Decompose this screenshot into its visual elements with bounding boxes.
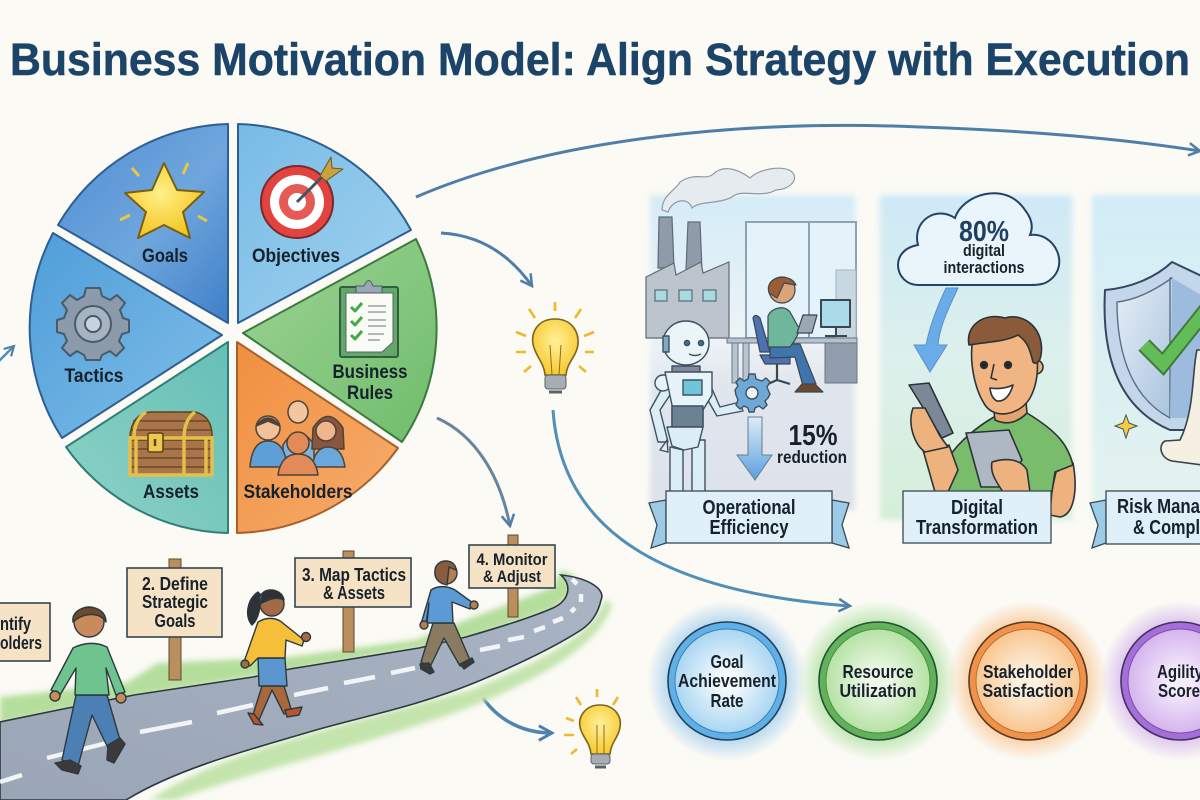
segment: stakeholders bbox=[237, 342, 398, 533]
kpi: stakeholder satisfaction: Satisfaction bbox=[982, 680, 1074, 701]
desk bbox=[727, 338, 857, 383]
banner: operational efficiency bbox=[649, 491, 849, 548]
kpi: goal achievement rate bbox=[647, 601, 807, 761]
panel: winding road bbox=[0, 535, 612, 800]
callout: cloud 80% digital interactions: interactions bbox=[944, 259, 1024, 277]
icon: smoke clouds bbox=[662, 168, 795, 212]
road grass upper bbox=[0, 570, 575, 724]
icon: lower light bulb bbox=[564, 689, 620, 767]
arrow: wheel to top bulb bbox=[441, 233, 532, 286]
signpost 4: & Adjust bbox=[483, 567, 541, 586]
segment: tactics bbox=[30, 233, 222, 438]
signpost 2: Strategic bbox=[142, 592, 208, 612]
kpi: goal achievement rate: Goal bbox=[710, 651, 744, 672]
person with phone and tablet bbox=[909, 317, 1075, 517]
panel: digital transformation bbox=[880, 193, 1075, 543]
icon: gear bbox=[57, 288, 129, 360]
label: business rules: Rules bbox=[347, 382, 393, 404]
segment: objectives bbox=[238, 124, 411, 323]
signpost 1 bbox=[0, 603, 50, 661]
icon: scroll document bbox=[1161, 350, 1200, 466]
signpost 3: & Assets bbox=[323, 583, 385, 603]
icon: sparkle bbox=[1115, 415, 1137, 438]
banner: digital transformation: Digital bbox=[951, 497, 1003, 519]
segment: business rules bbox=[243, 239, 437, 442]
stat: 15% reduction bbox=[777, 420, 847, 467]
kpi: goal achievement rate: Achievement bbox=[678, 670, 776, 691]
label: goals: Goals bbox=[142, 245, 188, 267]
kpi: stakeholder satisfaction: Stakeholder bbox=[983, 661, 1073, 682]
icon: target bbox=[261, 157, 343, 238]
road centre dashes bbox=[0, 579, 581, 782]
icon: people group bbox=[250, 401, 345, 475]
kpi: stakeholder satisfaction bbox=[948, 601, 1108, 761]
banner: digital transformation bbox=[903, 491, 1051, 543]
arrow: wheel down to road bbox=[437, 418, 510, 526]
signpost 4 bbox=[469, 535, 555, 617]
arrow: into wheel from left bbox=[0, 346, 14, 366]
signpost 3: 3. Map Tactics bbox=[302, 565, 406, 585]
stat: 15% reduction: 15% bbox=[788, 420, 838, 452]
panel: kpi circles bbox=[647, 601, 1200, 761]
person at desk bbox=[753, 277, 850, 392]
label: stakeholders: Stakeholders bbox=[244, 481, 353, 503]
callout: cloud 80% digital interactions: digital bbox=[963, 242, 1005, 260]
panel background bbox=[650, 195, 855, 510]
person: walker in green bbox=[50, 607, 126, 774]
panel: operational efficiency bbox=[646, 168, 857, 548]
icon: down arrow bbox=[737, 417, 772, 480]
signpost 2 bbox=[127, 559, 222, 680]
callout: cloud 80% digital interactions bbox=[898, 193, 1059, 285]
banner: operational efficiency: Efficiency bbox=[710, 517, 789, 539]
signpost 2: Goals bbox=[154, 611, 196, 631]
icon: clipboard bbox=[340, 280, 398, 357]
icon: factory bbox=[646, 217, 729, 338]
kpi: goal achievement rate: Rate bbox=[710, 690, 744, 711]
arrow: bulb to KPI circles bbox=[553, 410, 850, 606]
robot with gear bbox=[650, 321, 770, 500]
segment: assets bbox=[66, 342, 228, 533]
icon: star bbox=[120, 163, 207, 238]
label: business rules: Business bbox=[332, 361, 408, 383]
panel background bbox=[880, 195, 1072, 520]
banner: risk management and compliance bbox=[1090, 491, 1200, 548]
person: walker in blue bbox=[420, 561, 478, 674]
segment: goals bbox=[58, 124, 228, 323]
icon: treasure chest bbox=[130, 412, 212, 475]
kpi: resource utilization: Utilization bbox=[840, 680, 916, 701]
banner: digital transformation: Transformation bbox=[916, 517, 1038, 539]
signpost 2: 2. Define bbox=[142, 574, 208, 594]
panel background bbox=[1092, 195, 1200, 520]
signpost 1: ntify bbox=[0, 614, 31, 634]
label: business rules bbox=[332, 361, 408, 404]
signpost 1: olders bbox=[0, 633, 42, 653]
office window bbox=[746, 222, 856, 338]
road grass lower bbox=[150, 600, 612, 800]
icon: check mark bbox=[1144, 305, 1200, 364]
panel: motivation pie wheel bbox=[30, 124, 437, 533]
icon: arrow down from cloud bbox=[914, 288, 958, 372]
kpi: agility score bbox=[1100, 601, 1200, 761]
icon: shield bbox=[1105, 262, 1200, 430]
person: walker in yellow bbox=[241, 590, 310, 725]
kpi: resource utilization bbox=[798, 601, 958, 761]
panel: risk management and compliance bbox=[1090, 195, 1200, 548]
signpost 4: 4. Monitor bbox=[476, 550, 548, 569]
stat: 15% reduction: reduction bbox=[777, 447, 847, 467]
callout: cloud 80% digital interactions: 80% bbox=[959, 216, 1009, 248]
road surface bbox=[0, 575, 602, 800]
label: objectives: Objectives bbox=[252, 245, 340, 267]
kpi: resource utilization: Resource bbox=[842, 661, 914, 682]
arrow: road to lower bulb bbox=[483, 698, 552, 733]
banner: operational efficiency: Operational bbox=[702, 497, 796, 519]
icon: top light bulb bbox=[516, 302, 594, 392]
label: tactics: Tactics bbox=[64, 365, 124, 387]
signpost 3 bbox=[295, 551, 411, 652]
arrow: wheel across top to right bbox=[416, 125, 1200, 197]
label: assets: Assets bbox=[143, 481, 199, 503]
